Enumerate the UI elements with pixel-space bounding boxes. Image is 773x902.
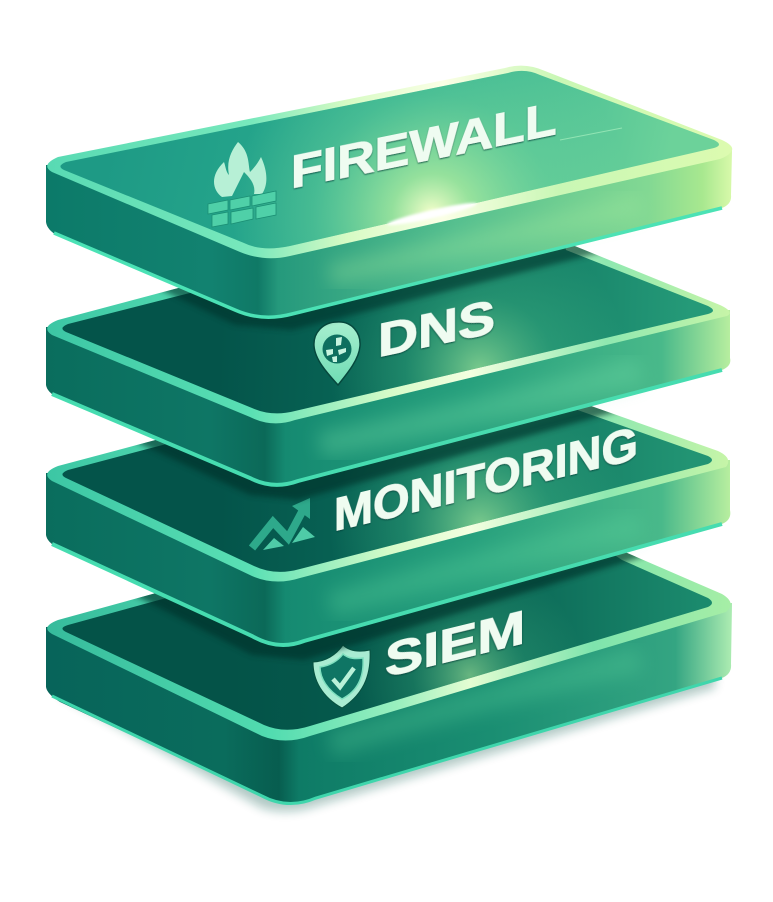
light streak — [560, 128, 622, 140]
slab shadow: DNS — [135, 406, 618, 503]
light flare — [386, 200, 478, 228]
slab rim: DNS — [47, 192, 730, 423]
slab side: SIEM — [46, 603, 732, 804]
ground shadow — [60, 640, 715, 812]
slab shadow: MONITORING — [134, 552, 644, 661]
slab top face: MONITORING — [62, 348, 712, 572]
slab rim: FIREWALL — [47, 66, 732, 258]
slab top face: SIEM — [62, 498, 712, 730]
layer: MONITORING — [46, 406, 730, 661]
icon: shield with check — [313, 645, 370, 708]
icon: rising chart arrow — [252, 498, 315, 550]
icon: location pin — [314, 322, 360, 385]
label: DNS: DNS — [378, 291, 495, 368]
icon: flame on brick wall — [208, 142, 276, 227]
slab top face: DNS — [62, 200, 713, 413]
layer: SIEM — [46, 552, 732, 805]
stacked security layers illustration — [46, 66, 732, 818]
slab side: DNS — [46, 310, 730, 485]
slab rim: SIEM — [47, 490, 731, 740]
slab side: FIREWALL — [46, 150, 732, 317]
slab rim: MONITORING — [47, 340, 728, 582]
layer: DNS — [46, 246, 730, 503]
slab shadow: FIREWALL — [160, 246, 600, 332]
label: MONITORING: MONITORING — [334, 417, 638, 541]
label: FIREWALL: FIREWALL — [291, 92, 557, 198]
slab top face: FIREWALL — [60, 71, 719, 248]
layer: FIREWALL — [46, 40, 732, 330]
label: SIEM: SIEM — [385, 601, 525, 688]
slab side: MONITORING — [46, 460, 730, 645]
